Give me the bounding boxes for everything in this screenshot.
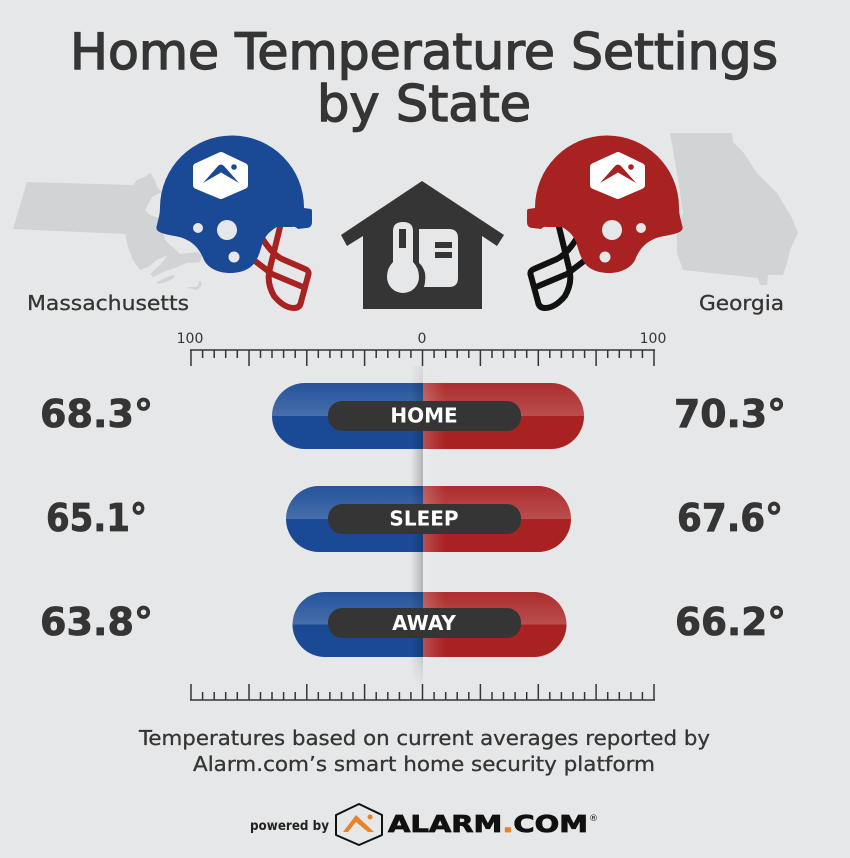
helmet: Georgia red bbox=[527, 135, 683, 308]
center axis shadow bbox=[413, 366, 423, 678]
scale labels: 100 bbox=[177, 331, 203, 347]
face mask: red bbox=[255, 227, 309, 308]
values: Georgia bbox=[674, 392, 786, 644]
title bbox=[70, 23, 778, 133]
scale labels: 0 bbox=[418, 331, 426, 347]
values: Massachusetts: 63.8° bbox=[40, 600, 153, 644]
title: Home Temperature Settings bbox=[70, 23, 778, 81]
scale labels bbox=[177, 331, 666, 347]
helmet: Massachusetts blue bbox=[156, 135, 312, 308]
bottom scale bbox=[190, 684, 655, 700]
map: Massachusetts bbox=[13, 173, 202, 290]
scale labels: 100 bbox=[640, 331, 666, 347]
label: Georgia: Georgia bbox=[699, 291, 784, 315]
caption: Alarm.com’s smart home security platform bbox=[193, 752, 655, 776]
map: Georgia bbox=[670, 133, 798, 285]
caption: Temperatures based on current averages reported by bbox=[138, 726, 710, 750]
footer: powered by Alarm.com: ALARM .COM bbox=[388, 812, 588, 838]
values: Georgia: 70.3° bbox=[674, 392, 786, 436]
footer: powered by Alarm.com: ® bbox=[589, 814, 598, 824]
values: Georgia: 66.2° bbox=[675, 600, 786, 644]
face mask: black bbox=[530, 227, 584, 308]
values: Georgia: 67.6° bbox=[677, 496, 783, 540]
label: Massachusetts: Massachusetts bbox=[27, 291, 189, 315]
bar: HOME bbox=[272, 383, 584, 449]
bar: SLEEP: SLEEP bbox=[389, 506, 459, 530]
bar: AWAY: AWAY bbox=[392, 611, 456, 635]
logo: blue helmet badge bbox=[197, 156, 244, 195]
footer: powered by Alarm.com bbox=[250, 804, 598, 845]
values: Massachusetts bbox=[40, 392, 153, 644]
icon: Alarm.com hexagon logo bbox=[336, 804, 382, 845]
values: Massachusetts: 65.1° bbox=[46, 496, 147, 540]
bar: HOME: HOME bbox=[390, 404, 458, 428]
footer: powered by Alarm.com: powered by bbox=[250, 819, 329, 834]
top scale bbox=[177, 331, 666, 366]
logo: red helmet badge bbox=[594, 156, 641, 195]
caption bbox=[138, 726, 710, 776]
icon: house with thermometer bbox=[341, 181, 504, 309]
bar: AWAY bbox=[292, 592, 567, 657]
values: Massachusetts: 68.3° bbox=[40, 392, 153, 436]
bar: SLEEP bbox=[286, 486, 571, 552]
title: by State bbox=[317, 75, 531, 133]
